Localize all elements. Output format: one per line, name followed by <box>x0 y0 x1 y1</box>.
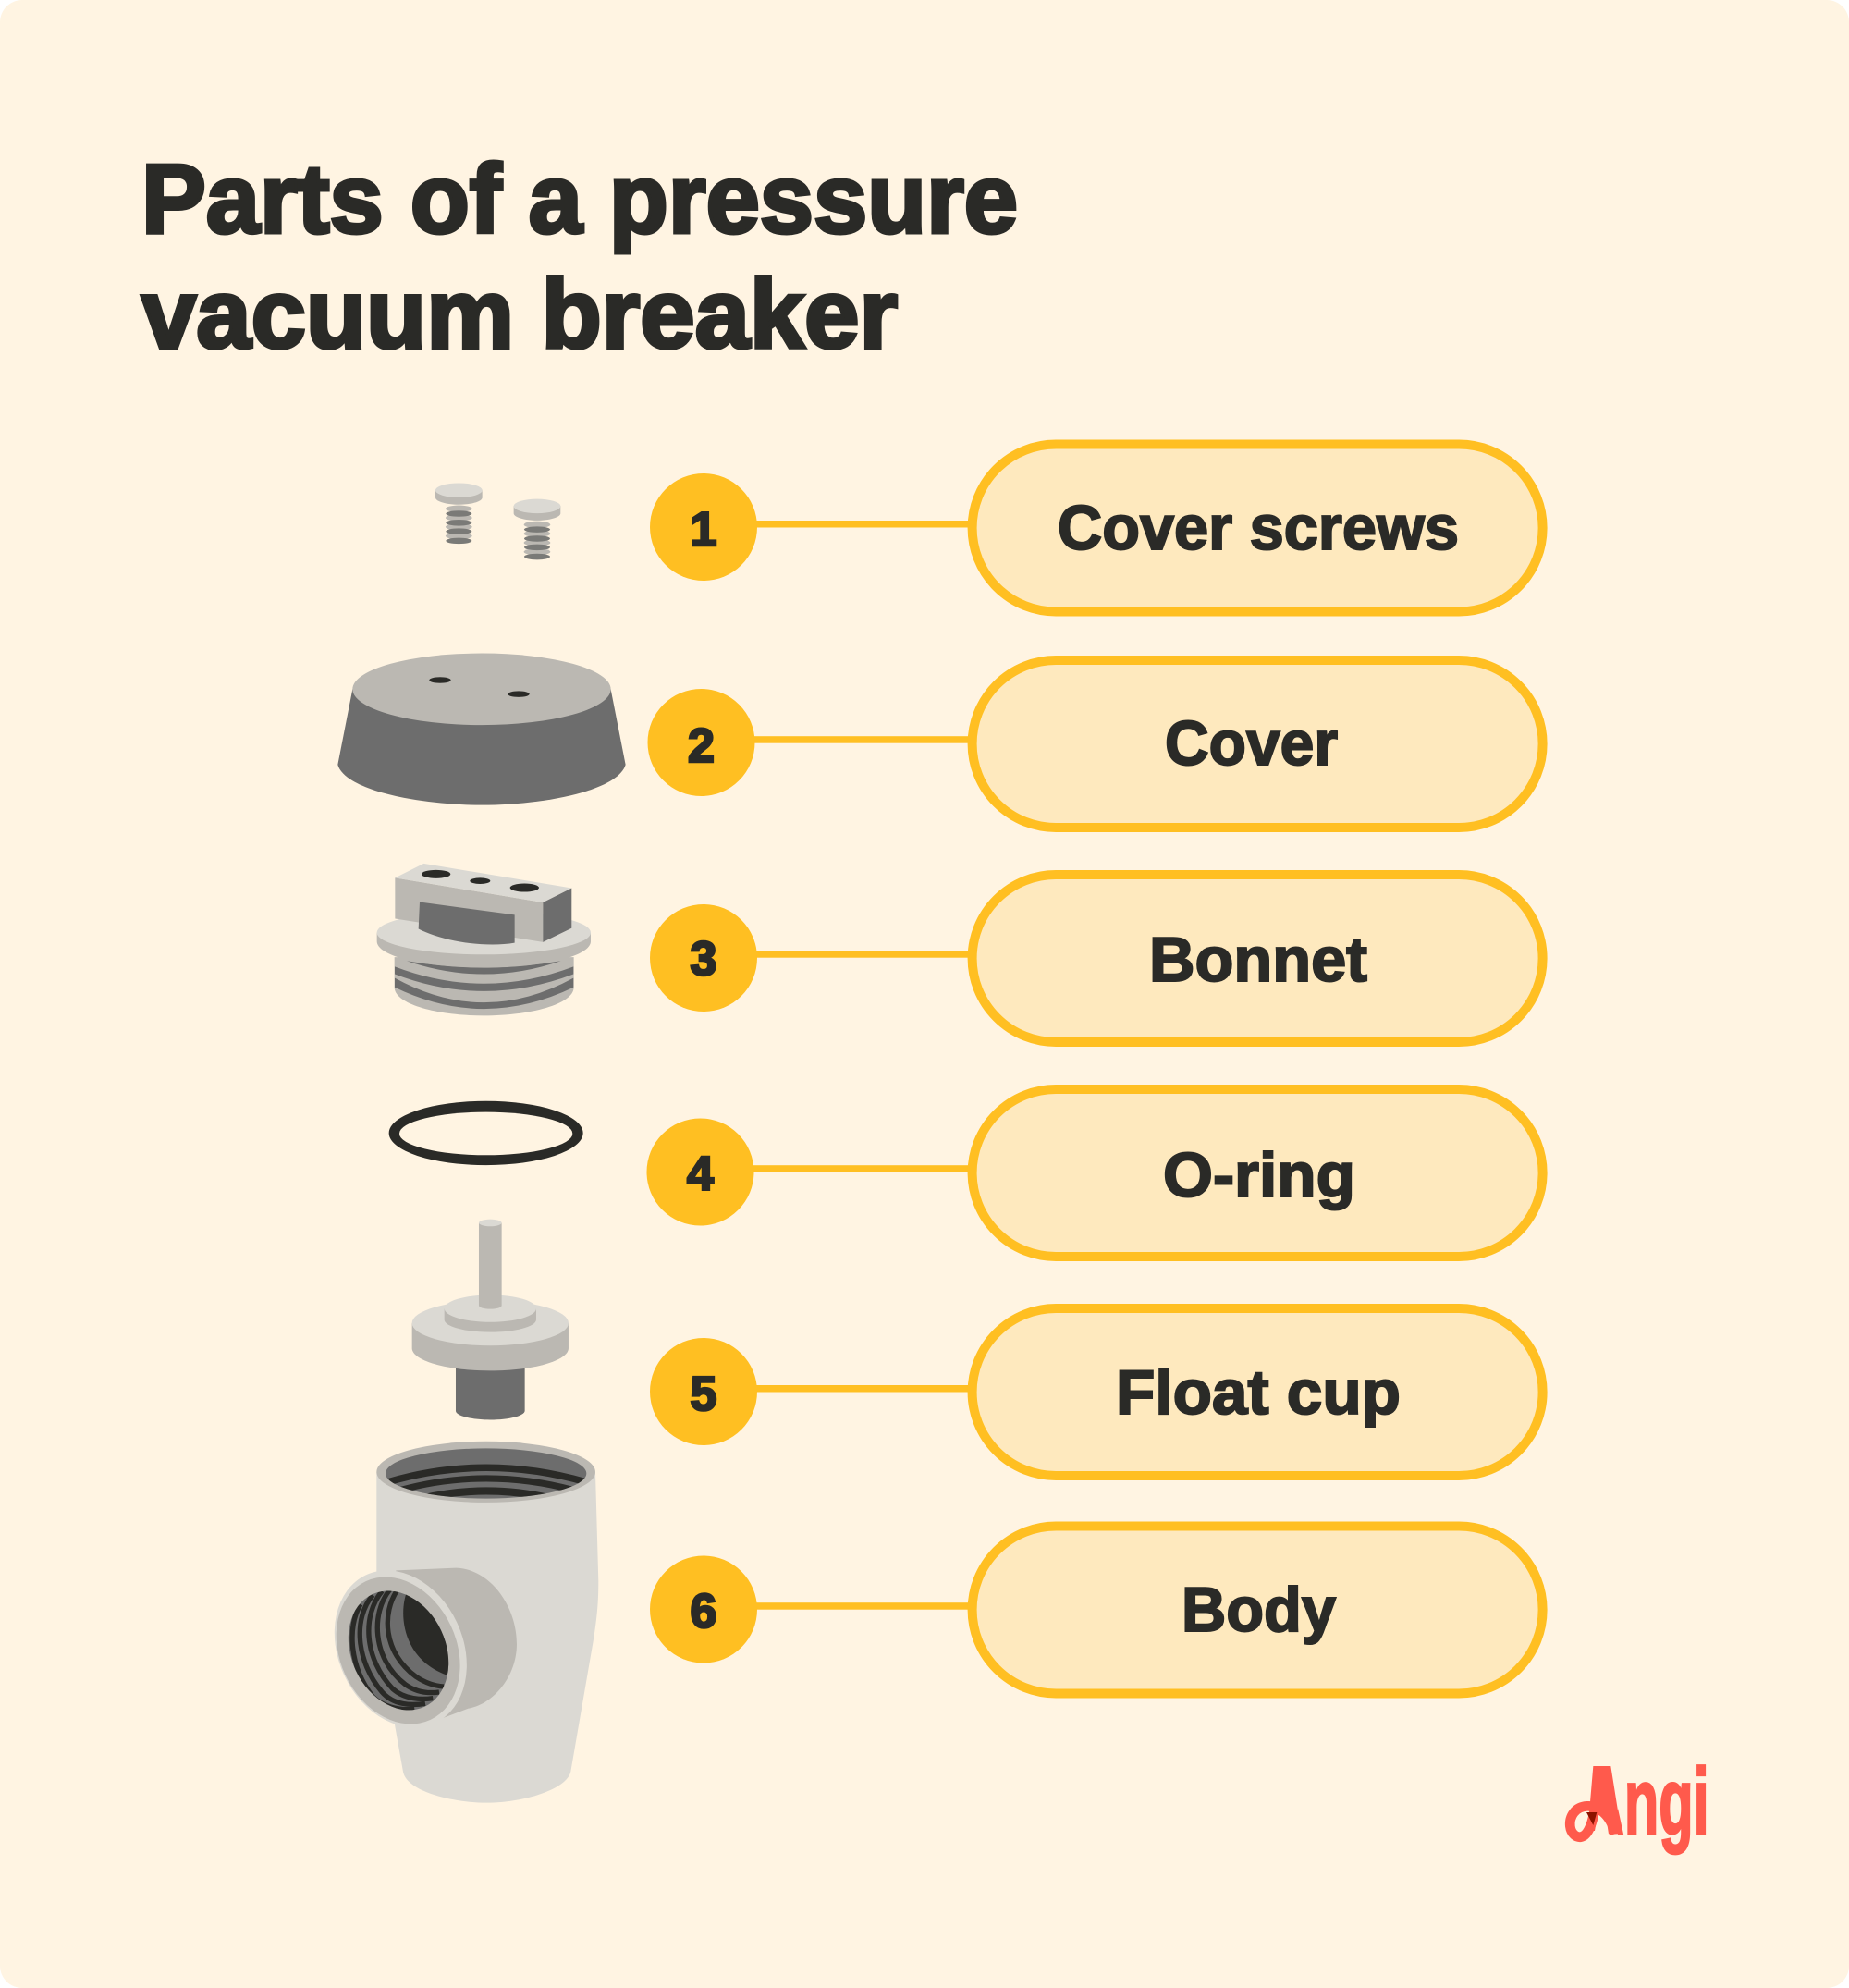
number badge 4 <box>647 1119 754 1226</box>
number badge 4: 4 <box>687 1147 714 1201</box>
row 2: cover <box>647 660 1543 828</box>
connector 1 <box>749 521 971 527</box>
row 6: body <box>650 1526 1543 1694</box>
icon: float cup <box>412 1220 569 1419</box>
number badge 5 <box>650 1338 757 1445</box>
icon: bonnet <box>377 864 591 1015</box>
parts illustration: o-ring, float cup, body <box>376 1101 598 1803</box>
number badge 1: 1 <box>691 503 716 557</box>
row 3: bonnet <box>650 875 1543 1042</box>
number badge 3: 3 <box>691 932 716 986</box>
row 1: cover screws <box>650 444 1543 612</box>
number badge 6: 6 <box>691 1585 716 1638</box>
logo: Angi: Angi <box>1584 1749 1709 1854</box>
number badge 5: 5 <box>691 1368 716 1421</box>
connector 6 <box>749 1602 971 1610</box>
label pill: Bonnet: Bonnet <box>1149 925 1367 995</box>
number badge 3 <box>650 904 757 1012</box>
label pill: Float cup <box>973 1308 1543 1476</box>
logo: Angi <box>1564 1764 1707 1855</box>
title <box>141 144 1018 369</box>
icon: body side opening <box>335 1568 517 1724</box>
icon: o-ring <box>389 1101 583 1165</box>
connector 4 <box>747 1165 971 1172</box>
row 5: float cup <box>650 1308 1543 1476</box>
row 4: o-ring <box>647 1089 1543 1257</box>
label pill: Body <box>973 1526 1543 1694</box>
number badge 6 <box>650 1555 757 1663</box>
parts illustration: screws, cover, bonnet <box>337 483 626 1015</box>
connector 2 <box>747 736 971 743</box>
label pill: O-ring: O-ring <box>1163 1140 1355 1210</box>
icon: cover screw left <box>435 483 483 544</box>
title: Parts of a pressure <box>141 144 1018 253</box>
title: vacuum breaker <box>141 260 898 369</box>
connector 3 <box>749 951 971 958</box>
icon: cover screw right <box>514 499 560 559</box>
label pill: O-ring <box>973 1089 1543 1257</box>
label pill: Float cup: Float cup <box>1116 1357 1401 1428</box>
number badge 2 <box>647 689 754 796</box>
label pill: Cover screws <box>973 444 1543 612</box>
number badge 2: 2 <box>688 719 715 773</box>
icon: cover <box>337 654 626 805</box>
label pill: Bonnet <box>973 875 1543 1042</box>
label pill: Cover <box>973 660 1543 828</box>
label pill: Cover screws: Cover screws <box>1058 493 1459 563</box>
icon: valve body <box>376 1442 598 1803</box>
connector 5 <box>749 1385 971 1393</box>
label pill: Cover: Cover <box>1165 708 1338 779</box>
label pill: Body: Body <box>1182 1575 1336 1645</box>
number badge 1 <box>650 473 757 581</box>
